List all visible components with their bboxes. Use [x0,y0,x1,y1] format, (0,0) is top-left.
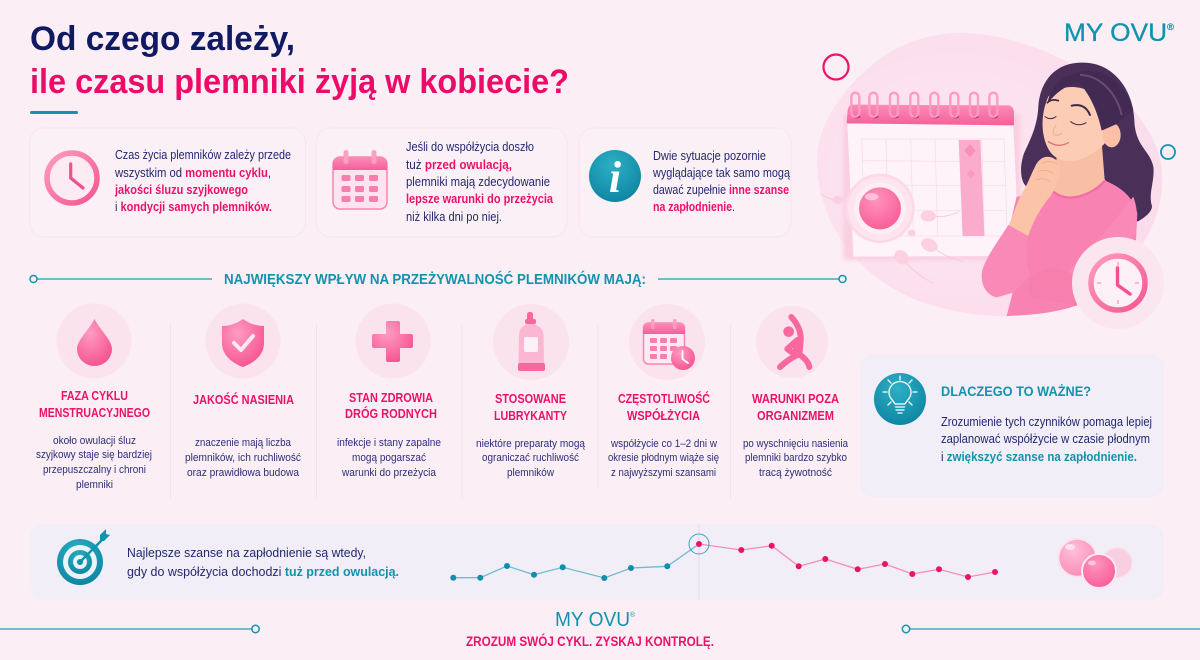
factor 2 description: oraz prawidłowa budowa [187,467,300,479]
factor 3 heading: DRÓG RODNYCH [345,406,437,421]
card 1 text [114,148,291,214]
factor 5 heading: CZĘSTOTLIWOŚĆ [618,391,710,406]
icon: calendar with clock [629,304,705,380]
icon: egg cells [1058,539,1132,588]
factor 1 description: około owulacji śluz [53,435,136,447]
factor 6 description: po wyschnięciu nasienia [743,438,849,450]
panel: why it matters [860,354,1164,497]
factor: cycle phase [36,304,152,491]
panel text: zaplanować współżycie w czasie płodnym [941,432,1150,446]
factor 4 heading: LUBRYKANTY [494,409,568,423]
factor 6 description: tracą żywotność [759,467,832,479]
factor 4 description: plemników [507,467,554,479]
factor 4 description: ograniczać ruchliwość [482,452,579,464]
panel: card 1 cycle timing [30,128,306,237]
factor 2 description [185,437,301,479]
factor 3 heading: STAN ZDROWIA [349,391,433,405]
logo: top right: MY OVU [1064,19,1162,47]
icon: light bulb [874,373,926,425]
calendar illustration [843,93,1020,260]
factor 6 heading [752,392,839,423]
factor: reproductive tract health [337,304,441,479]
egg cell and sperm [820,175,963,283]
card 2 text: Jeśli do współżycia doszło [406,140,534,154]
card 1 text: i kondycji samych plemników. [115,200,272,214]
decorative ring: pink [824,54,848,80]
title: Od czego zależy, [30,20,295,58]
illustration: woman thinking with calendar, egg and clock [817,33,1175,329]
card 1 text: Czas życia plemników zależy przede [115,148,291,162]
decorative ring: teal [1161,145,1175,159]
factor 3 description: infekcje i stany zapalne [337,437,441,449]
factor 5 description [608,438,719,479]
icon: info [589,150,641,202]
factor 5 description: okresie płodnym wiąże się [608,452,719,464]
factor 5 description: współżycie co 1–2 dni w [610,438,717,450]
clock badge [1072,237,1164,329]
factor 6 description [743,438,849,479]
factor 2 description: znaczenie mają liczba [195,437,292,449]
background blob [817,33,1162,316]
panel: card 3 two situations [579,128,791,237]
card 3 text: na zapłodnienie. [653,200,735,214]
factor 3 description: mogą pogarszać [352,452,426,464]
icon: target with arrow [57,529,110,585]
card 2 text: tuż przed owulacją, [406,158,512,172]
factor: semen quality [185,304,301,479]
panel: card 2 before ovulation [316,128,567,237]
card 2 text [406,140,554,224]
factor 5 description: z najwyższymi szansami [611,467,716,479]
footer connector: right [902,625,1200,633]
best chances text [127,545,399,579]
card 3 text: wyglądające tak samo mogą [652,166,790,180]
woman [982,63,1154,316]
card 2 text: niż kilka dni po niej. [406,210,502,224]
section heading with connector lines: NAJWIĘKSZY WPŁYW NA PRZEŻYWALNOŚĆ PLEMNIKÓW MAJĄ: [224,270,646,288]
icon: calendar [333,150,387,209]
factor 6 heading: ORGANIZMEM [757,409,834,423]
section heading with connector lines [30,270,846,288]
card 3 text: Dwie sytuacje pozornie [653,149,766,163]
icon: cross [356,304,430,378]
card 2 text: plemniki mają zdecydowanie [406,175,550,189]
factor 5 heading: WSPÓŁŻYCIA [627,408,700,423]
panel text: i zwiększyć szanse na zapłodnienie. [941,450,1137,464]
title: ile czasu plemniki żyją w kobiecie? [30,63,569,101]
footer logo: MY OVU [555,609,634,631]
factor: intercourse frequency [608,304,719,479]
factor 3 description [337,437,441,479]
best chances text: Najlepsze szanse na zapłodnienie są wtedy, [127,545,366,560]
factor 6 description: plemniki bardzo szybko [745,452,847,464]
icon: tube [493,304,569,380]
icon: shield [206,304,280,378]
card 2 text: lepsze warunki do przeżycia [406,192,554,206]
panel text: Zrozumienie tych czynników pomaga lepiej [941,415,1152,429]
factor 1 description [36,435,152,491]
factor 1 heading [39,389,150,420]
icon: drop [56,304,132,378]
best chances text: gdy do współżycia dochodzi tuż przed owulacją. [127,564,399,579]
factor 1 description: szyjkowy staje się bardziej [36,449,152,461]
footer connector: left [0,625,259,633]
factor 5 heading [618,391,710,423]
icon: stretching figure [756,306,828,378]
factor 4 heading [494,392,568,423]
icon: clock [47,153,97,203]
factor 6 heading: WARUNKI POZA [752,392,839,406]
factor 4 description [476,438,586,479]
panel heading: DLACZEGO TO WAŻNE? [941,383,1091,399]
factor 2 heading: JAKOŚĆ NASIENIA [193,392,294,407]
card 3 text: dawać zupełnie inne szanse [653,183,789,197]
factor 2 description: plemników, ich ruchliwość [185,452,301,464]
factor 1 description: plemniki [76,479,113,491]
panel text [941,415,1152,464]
icon: info: i [609,153,622,202]
factor 4 heading: STOSOWANE [495,392,566,406]
logo: top right: ® [1167,22,1174,32]
factor: lubricants [476,304,586,479]
card 1 text: jakości śluzu szyjkowego [114,183,248,197]
title [30,20,569,114]
factor: conditions outside the body [743,306,849,479]
factor 1 heading: MENSTRUACYJNEGO [39,406,150,420]
card 1 text: wszystkim od momentu cyklu, [114,166,271,180]
footer tagline: ZROZUM SWÓJ CYKL. ZYSKAJ KONTROLĘ. [466,634,714,649]
factor 3 heading [345,391,437,421]
card 3 text [652,149,790,214]
factor 3 description: warunki do przeżycia [341,467,437,479]
factor 4 description: niektóre preparaty mogą [476,438,586,450]
factor 1 description: przepuszczalny i chroni [43,464,146,476]
line chart: fertility over the cycle [450,524,998,600]
panel: best chances with cycle chart [30,524,1164,600]
factor 1 heading: FAZA CYKLU [61,389,128,403]
footer logo: ® [630,611,636,619]
